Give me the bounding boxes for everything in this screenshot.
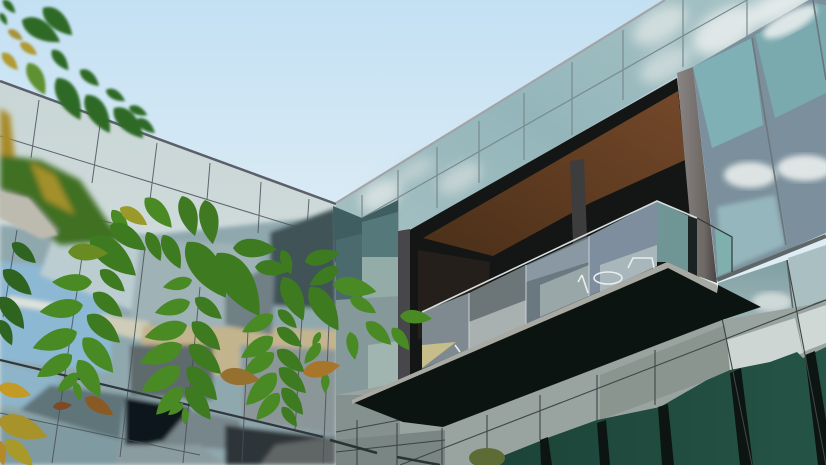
pinnate leaves bbox=[52, 274, 92, 291]
left structural pillar bbox=[398, 229, 410, 385]
lower storey glass bbox=[330, 260, 826, 465]
small shrub at bottom bbox=[469, 448, 505, 465]
autumn leaves bbox=[301, 357, 342, 380]
blurred autumn mass bbox=[0, 108, 128, 245]
right large glass panes bbox=[693, 0, 826, 335]
side glass rail beyond the column bbox=[715, 226, 732, 276]
foreground tree leaves bbox=[0, 0, 433, 465]
black mullions bbox=[540, 351, 826, 465]
dense central cluster bbox=[68, 217, 348, 336]
recessed opening bbox=[408, 78, 700, 385]
left glass building wing bbox=[0, 81, 340, 465]
cloud reflections bbox=[354, 0, 822, 218]
wood ceiling bbox=[423, 91, 685, 256]
glass balustrade bbox=[422, 201, 732, 369]
dark interior panes bbox=[418, 250, 490, 340]
dark glass corner bbox=[333, 200, 398, 262]
reflections in lower left glass bbox=[0, 208, 340, 465]
chairs and table bbox=[455, 258, 655, 352]
concrete balcony slab bbox=[352, 262, 761, 427]
right branch leaves bbox=[331, 274, 378, 300]
right glass facade upper band bbox=[333, 0, 826, 400]
interior column bbox=[570, 159, 587, 244]
right structural column bbox=[677, 67, 717, 283]
blurred upper-left leaves bbox=[0, 0, 158, 144]
